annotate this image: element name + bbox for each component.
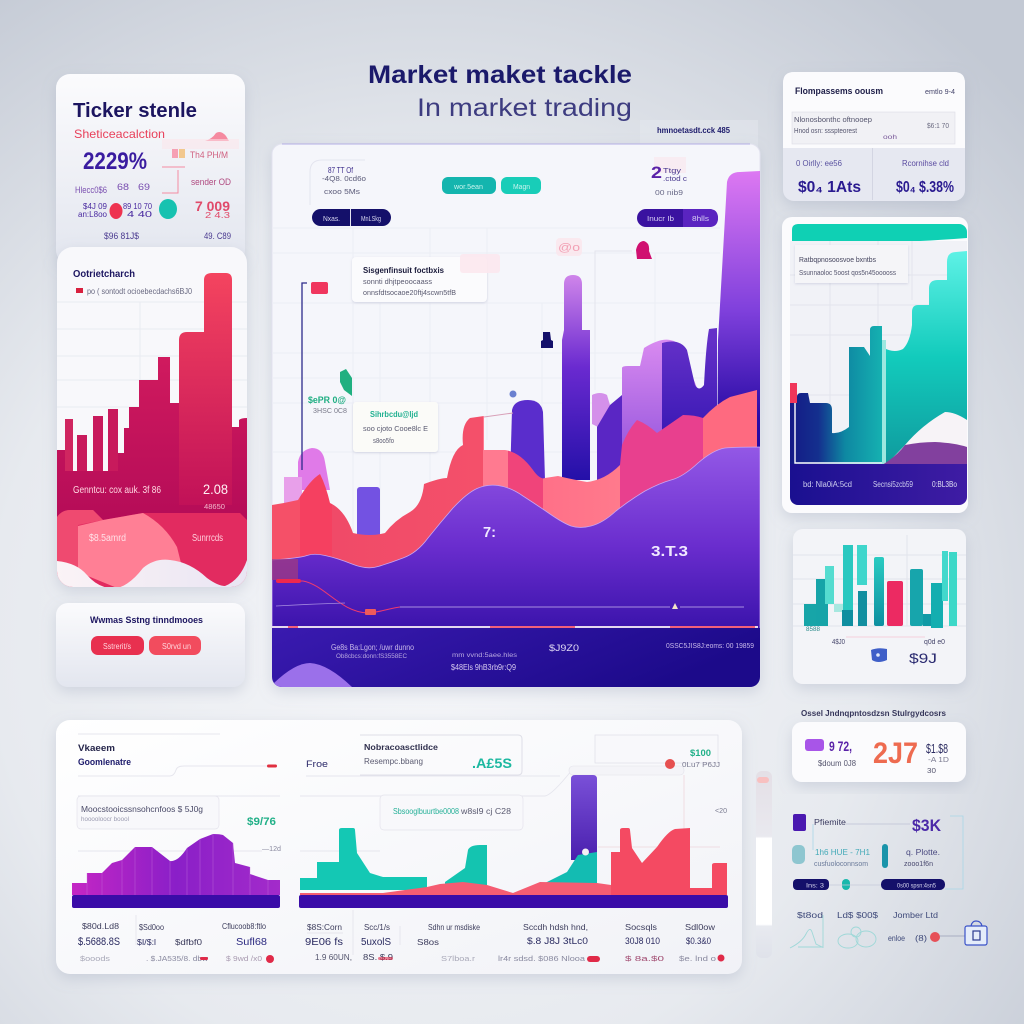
middle callout top: .A£5S — [472, 755, 512, 771]
right callout — [569, 735, 727, 850]
purple bar — [571, 775, 597, 860]
market indicator lines — [272, 579, 758, 628]
wave layers — [57, 510, 247, 590]
panel: top-right stats card — [783, 72, 965, 201]
title — [368, 61, 632, 122]
callout: top-right stats: .ctod c — [663, 174, 687, 183]
callout on teal chart: Ratbqpnosoosvoe bxntbs — [799, 255, 876, 264]
legend row two: zooo1f6n — [904, 859, 933, 868]
stat left: $0₄ 1Ats — [798, 179, 861, 196]
stats row: $0.3&0 — [686, 936, 711, 946]
bars — [804, 545, 957, 628]
top-right caption over main chart — [640, 120, 758, 150]
teal buttons — [442, 177, 541, 194]
navy button — [312, 209, 391, 226]
stat labels — [75, 150, 231, 241]
stat labels: sender OD — [191, 177, 231, 187]
middle heading — [306, 742, 438, 769]
chart value labels: Genntcu: cox auk. 3f 86 — [73, 485, 161, 496]
footer text of main chart: Ob8cbcs:donn:fS3558EC — [336, 653, 407, 660]
purple button: Inucr Ib — [647, 214, 674, 223]
dark footer — [790, 464, 967, 505]
panel: red buttons — [56, 603, 245, 687]
callout: top-left stats — [310, 160, 366, 205]
stat labels: 4 40 — [127, 209, 152, 219]
right value: $1.$8 — [926, 741, 948, 756]
bars — [790, 251, 967, 470]
card heading: Flompassems oousm — [795, 86, 883, 96]
button right: S0rvd un — [162, 642, 191, 651]
panel: small teal bars — [793, 529, 966, 684]
panel: teal chart — [782, 217, 968, 513]
stat labels: 68 — [117, 182, 129, 192]
left heading — [78, 743, 277, 768]
legend row three: 0s00 spsn:4sn5 — [897, 882, 936, 890]
stats row: 30J8 010 — [625, 936, 660, 946]
icon row labels: $t8od — [797, 910, 823, 920]
magenta marker — [595, 241, 652, 340]
footer text of main chart — [331, 641, 754, 672]
stats row: S7lboa.r — [441, 954, 476, 963]
stat right: $0₄ $.38% — [896, 179, 954, 196]
panel heading: Wwmas Sstng tinndmooes — [90, 615, 203, 626]
panel: bottom dashboard — [56, 720, 742, 974]
stat left: 0 Oirlly: ee56 — [796, 158, 842, 168]
middle heading: Froe — [306, 759, 328, 769]
left callout: $9/76 — [247, 816, 276, 828]
icon: teal outline fruits — [838, 927, 876, 948]
navy button: MnLSkg — [361, 214, 381, 223]
callout: green signal: soo cjoto Cooe8lc E — [363, 424, 428, 433]
chart value labels: 48650 — [204, 504, 225, 511]
axis labels — [806, 627, 945, 646]
middle heading: Nobracoasctlidce — [364, 742, 438, 752]
white data labels: 3.T.3 — [651, 543, 688, 560]
bottom left mound — [274, 663, 352, 687]
chart value labels: 2.08 — [203, 481, 228, 497]
middle callout top — [360, 735, 522, 775]
dark lower band — [272, 628, 760, 687]
legend row three — [793, 879, 945, 890]
big percent: 2229% — [83, 148, 147, 175]
purple button: 8hlls — [692, 214, 709, 223]
red dot — [110, 203, 122, 219]
purple square icon — [793, 814, 806, 831]
back purple bars — [284, 171, 760, 539]
button left: Sstrerit/s — [103, 642, 131, 651]
inner note: $6:1 70 — [927, 121, 949, 130]
row status dots — [200, 954, 724, 963]
stats row: Socsqls — [625, 922, 657, 932]
right value: -A 1D — [928, 757, 949, 764]
icon row labels: enloe — [888, 933, 905, 943]
coral area — [272, 390, 757, 568]
stats row: Sdl0ow — [685, 922, 716, 932]
stats row: 5uxolS — [361, 937, 391, 948]
inner note: Hnod osn: ssspteorest — [794, 126, 858, 135]
teal dot — [159, 199, 177, 219]
footer text of main chart: 0SSC5JIS8J:eoms: 00 19859 — [666, 641, 754, 650]
stats row: lr4r sdsd. $086 Nlooa — [498, 954, 586, 963]
left callout: —12d — [262, 846, 281, 853]
button left — [91, 636, 144, 655]
icon row labels: (8) — [915, 933, 927, 943]
left callout: Moocstooicssnsohcnfoos $ 5J0g — [81, 805, 203, 814]
stats row: Scc/1/s — [364, 922, 390, 932]
callout: signal description: onnsfdtsocaoe20ftj4scwn5tfB — [363, 288, 456, 297]
heading: ticker: Ticker stenle — [73, 100, 197, 122]
title: Market maket tackle — [368, 61, 632, 89]
icon: teal outline hand — [790, 915, 823, 948]
callout: top-right stats: Ttgy — [663, 166, 681, 175]
middle heading: Resempc.bbang — [364, 756, 423, 766]
axis labels: 8588 — [806, 627, 821, 633]
button right — [149, 636, 201, 655]
right callout: $100 — [690, 748, 711, 758]
card heading — [795, 86, 955, 96]
caption above summary card: Ossel Jndnqpntosdzsn Stulrgydcosrs — [801, 708, 946, 718]
stats row: $.8 J8J 3tLc0 — [527, 936, 588, 946]
stat labels: 7 009 — [195, 198, 230, 214]
stat labels: Hlecc0$6 — [75, 185, 107, 195]
legend row one — [814, 816, 942, 835]
callout: green signal: s8oo5fo — [373, 436, 394, 445]
left callout: hooooloocr boool — [81, 817, 129, 823]
stats row: $.5688.8S — [78, 936, 120, 948]
icon: red dot connector — [930, 932, 965, 942]
panel: legend details — [790, 814, 987, 948]
stats row: $80d.Ld8 — [82, 921, 119, 931]
stats row: $ 9wd /x0 — [226, 954, 262, 963]
marker: navy icon — [541, 332, 553, 348]
right value: 30 — [927, 766, 936, 775]
callout: top-right stats: 00 nib9 — [655, 188, 683, 197]
callout: green signal: Sihrbcdu@ljd — [370, 409, 418, 419]
chart value labels: $8.5amrd — [89, 533, 126, 544]
stat right — [896, 158, 954, 196]
marker: green flag and label: 3HSC 0C8 — [313, 406, 347, 415]
stats row: Sdhn ur msdiske — [428, 922, 480, 932]
stat labels: 69 — [138, 182, 150, 192]
callout: signal description: Sisgenfinsuit foctbxis — [363, 265, 444, 275]
legend row two — [814, 844, 940, 868]
white data labels — [483, 524, 688, 560]
stats row: $ooods — [80, 954, 110, 963]
stat labels: 2 4.3 — [205, 211, 231, 220]
marker: green flag and label: $ePR 0@ — [308, 395, 346, 405]
stats row: S8os — [417, 937, 439, 947]
chart value labels — [73, 481, 228, 544]
axis labels: q0d e0 — [924, 637, 945, 646]
right value — [926, 741, 949, 775]
left heading: Goomlenatre — [78, 757, 131, 767]
top-right caption over main chart: hmnoetasdt.cck 485 — [657, 126, 731, 135]
footer text of main chart: $J9Z0 — [549, 643, 579, 653]
panel: red bar chart — [57, 247, 247, 590]
callout: top-left stats: 87 TT Of — [328, 166, 354, 175]
footer text of main chart: Ge8s Ba:Lgon; /uwr dunno — [331, 643, 414, 652]
callout on teal chart — [795, 245, 908, 283]
dark footer: Secnsi5zcb59 — [873, 480, 913, 489]
stat right: Rcornihse cld — [902, 158, 949, 168]
stats row: 9E06 fs — [305, 936, 343, 948]
marker: green flag and label — [308, 369, 352, 415]
left heading: Vkaeem — [78, 743, 115, 753]
callout: top-right stats — [651, 157, 687, 197]
inner note — [792, 112, 955, 144]
stat left — [796, 158, 861, 196]
right callout: 0Lu7 P6JJ — [682, 762, 720, 769]
stat labels: $96 81J$ — [104, 231, 139, 241]
stats row: Cflucoob8:ftlo — [222, 921, 266, 931]
ghost pink tag: @o — [558, 242, 580, 254]
purple value: $doum 0J8 — [818, 759, 857, 768]
stats row — [78, 921, 716, 963]
panel: ticker summary — [56, 74, 245, 264]
chart legend: po ( sontodt ocioebecdachs6BJ0 — [87, 287, 192, 296]
legend row one: $3K — [912, 816, 942, 835]
title: In market trading — [417, 94, 632, 122]
footer text of main chart: $48Els 9hB3rb9r:Q9 — [451, 663, 516, 672]
callout on teal chart: Ssunnaoloc 5oost qos5n45ooooss — [799, 268, 896, 277]
stats row: 1.9 60UN, — [315, 953, 352, 962]
callout: top-left stats: -4Q8. 0cd6o — [322, 174, 366, 183]
white data labels: 7: — [483, 524, 496, 541]
stat labels: an:L8oo — [78, 210, 108, 219]
middle callout lower: w8sl9 cj C28 — [460, 807, 512, 816]
middle callout lower: Sbsooglbuurtbe0008 — [393, 807, 459, 816]
legend row three: Ins: 3 — [806, 882, 824, 890]
right callout: <20 — [715, 808, 727, 815]
icon: blue bag — [965, 921, 987, 945]
stats row: $e. lnd o — [679, 954, 716, 963]
stats row: Sufl68 — [236, 937, 267, 948]
callout: top-left stats: cxoo 5Ms — [324, 187, 360, 196]
icon row labels: Jomber Ltd — [893, 910, 938, 920]
callout: green signal — [353, 402, 438, 452]
stats row: $Sd0oo — [139, 922, 164, 932]
purple value — [818, 738, 857, 768]
callout: top-right stats: 2 — [651, 163, 662, 182]
inner note: Nlonosbonthc oftnooep — [794, 115, 872, 124]
axis labels: 4$J0 — [832, 637, 845, 646]
callout: signal description — [352, 254, 500, 302]
legend row one: Pfiemite — [814, 817, 846, 827]
middle callout lower — [380, 795, 523, 830]
front purple area — [272, 447, 760, 630]
stats row: Sccdh hdsh hnd, — [523, 922, 588, 932]
chart value labels: Sunrrcds — [192, 533, 223, 544]
left callout — [77, 796, 281, 853]
stats row: $ 8a.$0 — [625, 954, 664, 963]
subheading: ticker: Sheticeacalction — [74, 127, 165, 141]
teal header band — [792, 224, 967, 241]
teal blob icon — [792, 845, 805, 864]
stats row: $I/$:l — [137, 937, 156, 947]
legend row two: 1h6 HUE - 7H1 — [815, 847, 870, 857]
purple value: 9 72, — [829, 738, 852, 754]
purple area chart — [72, 834, 280, 908]
white and purple mound — [884, 412, 967, 464]
purple button — [637, 209, 718, 227]
stats row: $dfbf0 — [175, 937, 202, 947]
legend row two: cusfuoloconnsom — [814, 859, 868, 868]
dark footer: 0:BL3Bo — [932, 480, 957, 489]
panel: main market chart — [272, 144, 760, 687]
footer text of main chart: mm vvnd:5aee.hles — [452, 652, 518, 659]
stats row: 8S. $.9 — [363, 953, 394, 962]
purple tag — [805, 739, 824, 751]
blue icon — [871, 648, 887, 662]
teal buttons: Magn — [513, 182, 530, 191]
legend row two: q. Plotte. — [906, 847, 940, 857]
bars — [57, 273, 247, 590]
stat labels: 49. C89 — [204, 231, 231, 241]
ghost pink tag — [556, 238, 582, 256]
icon row labels — [797, 910, 938, 943]
icon row labels: Ld$ $00$ — [837, 910, 878, 920]
dark footer: bd: Nla0iA:5cd — [803, 480, 852, 489]
card heading: emtlo 9-4 — [925, 89, 955, 96]
mixed area chart — [299, 775, 728, 908]
stat labels: 89 10 70 — [123, 201, 152, 211]
value: $9J — [909, 650, 937, 666]
vertical scrollbar — [756, 771, 772, 958]
stat labels: $4J 09 — [83, 201, 107, 211]
chart heading: Ootrietcharch — [73, 268, 135, 280]
stat labels: Th4 PH/M — [190, 150, 228, 160]
stats row: . $.JA535/8. dbw — [146, 954, 209, 963]
callout: signal description: sonnti dhjtpeoocaass — [363, 277, 432, 286]
inner note: ooh — [883, 134, 897, 141]
marker: blue pin with connector — [484, 390, 516, 417]
mini pink chart — [162, 132, 239, 193]
teal buttons: wor.5ean — [453, 182, 483, 191]
stats row: $8S:Corn — [307, 922, 342, 932]
marker: pink tag and axis line — [302, 282, 328, 470]
panel: summary card — [792, 722, 966, 782]
orange value: 2J7 — [873, 737, 918, 770]
navy button: Nxas. — [323, 214, 340, 223]
